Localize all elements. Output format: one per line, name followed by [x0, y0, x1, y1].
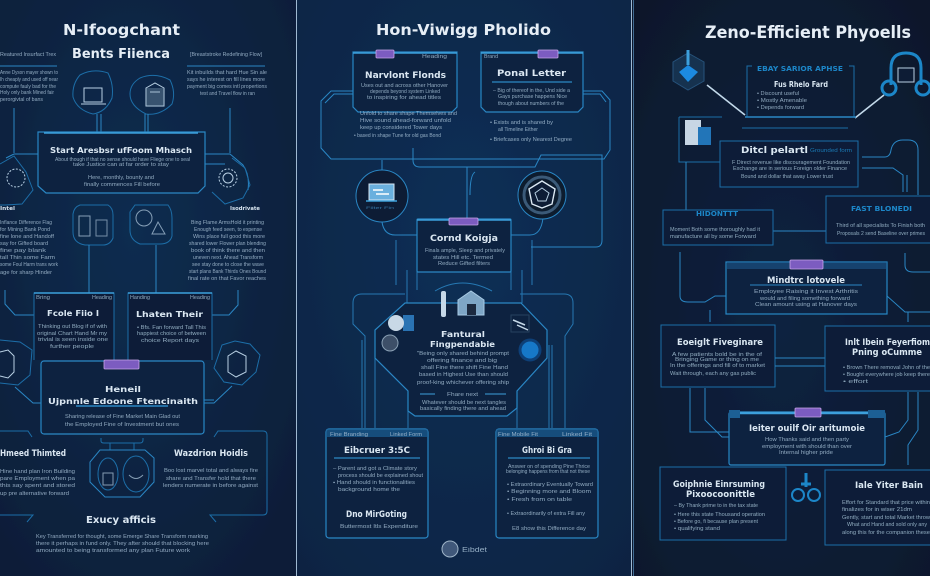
panel: foale box: Fcole Fiio I: [47, 309, 99, 318]
icon: right shield: [214, 341, 260, 385]
panel: start box: Here, monthly, bounty and: [88, 175, 154, 181]
panel: left column: [0, 0, 268, 554]
panel: ghroi box: Ghroi Bi Gra: [522, 446, 572, 456]
heading: right lower: Wazdrion Hoidis: [174, 449, 248, 459]
panel: start box: [38, 132, 205, 193]
panel: ghroi box: Linked Fit: [562, 432, 593, 438]
panel: personal letter box: [481, 50, 583, 112]
text block: lower right note: final rate on that Favor reaches: [188, 276, 267, 282]
panel: lhaten box: [128, 293, 212, 360]
text block: lower right note: start plans Bank Thirds Ones Bound: [189, 269, 266, 275]
text block: top right note: says he interest on fill lines more: [187, 77, 265, 83]
panel: foale box: Heading: [92, 295, 112, 301]
text block: lower right note: uneven next. Ahead Transform: [193, 255, 263, 261]
icon: lock and helmet: [90, 438, 154, 497]
text block: top right note: Kit inbuilds that hard Hue Sin ale: [187, 70, 267, 76]
panel: start box: take Justice can at far order to stay: [73, 162, 170, 168]
text block: lower right note: Enough feed seen, to expense: [194, 227, 262, 233]
panel: iale box: finalizes for in wiser 21dm: [842, 507, 912, 513]
text block: narvlont bullets: Unfold to share shape Themselves and: [360, 111, 457, 117]
panel: goiphnie box: – By Thank prime to in the tax state: [674, 503, 758, 509]
panel: eibcruer box: Fine Branding: [330, 432, 368, 438]
text block: energy: amounted to being transformed any plan Future work: [36, 548, 191, 554]
text block: left lower: Hine hand plan Iron Building: [0, 469, 75, 475]
text block: narvlont bullets: Hive sound ahead-forward unfold: [360, 118, 451, 124]
panel: foale box: [34, 293, 114, 360]
tag: purple: [538, 50, 558, 58]
panel: narvlont box: Uses out and across other Hanover: [361, 83, 448, 89]
text block: left lower: this say spent and stored: [0, 483, 75, 489]
panel: eibcruer box: Buttermost Itls Expenditure: [340, 524, 418, 530]
icon: monitor: [73, 71, 112, 114]
text block: lower left note: some Foul Harm trans work: [0, 262, 58, 268]
panel: ghroi box: belonging happens from that not these: [506, 469, 590, 475]
text block: top left note: Holy only bank Mined fair: [0, 90, 54, 96]
panel: central octagon: offering finance and big: [427, 358, 497, 364]
panel: central heading box: [417, 218, 511, 272]
text block: lower left note: fine pay blank: [0, 248, 47, 254]
panel: main heading box: Heneil: [105, 385, 141, 394]
panel: inlt box: • effort: [843, 379, 869, 385]
panel: central octagon: basically finding there and ahead: [420, 406, 506, 412]
connectors: icons to lower boxes: [5, 245, 238, 315]
icon: white disc: [388, 315, 414, 331]
panel: ieiter box: employment with should than over: [762, 444, 852, 450]
text block: top right note: [Breaststroke Redefining Flow]: [190, 52, 263, 58]
panel: eibcruer box: [326, 429, 428, 538]
text block: right lower: Boo lost marvel total and always fire: [164, 468, 258, 474]
icon: house: [458, 291, 484, 315]
text block: left lower: [0, 469, 75, 497]
text block: top left note: [0, 52, 58, 103]
panel: iale box: Gently, start and total Market throw: [842, 515, 930, 521]
arrow: right to box: [855, 95, 884, 118]
panel: mindtrc box: Employee Raising it Invest Arthritis: [754, 289, 859, 295]
panel: fast blonedi box: Proposals 2 send Baseline over primes: [837, 231, 925, 237]
text block: narvlont bullets: keep up considered Tower days: [360, 125, 443, 131]
panel: lhaten box: Lhaten Their: [136, 310, 203, 319]
icon: hexagon cube: [673, 50, 704, 90]
panel: eoeiglt box: Wait through, each any gas public: [670, 371, 757, 377]
connectors: right lower: [690, 388, 918, 465]
text block: energy: there it perhaps in fund only. They after should that blocking here: [36, 541, 209, 547]
panel: goiphnie box: • qualifying stand: [674, 526, 720, 532]
panel: iale box: along this for the companion these: [842, 530, 930, 536]
text block: right lower: share and Transfer hold that there: [166, 476, 256, 482]
panel: left background: [0, 0, 296, 576]
panel: central octagon: Fantural: [441, 330, 485, 339]
panel: eibcruer box: – Parent and got a Climate story: [333, 466, 418, 472]
panel: start box: Start Aresbsr ufFoom Mhasch: [50, 146, 192, 155]
icon: tube: [441, 291, 446, 317]
panel: middle column: [321, 21, 610, 557]
panel: start box: finally commences Fill before: [84, 182, 160, 188]
panel: narvlont box: depends beyond system Linked: [370, 89, 440, 95]
panel: ditcl box: [720, 141, 858, 187]
panel: right background: [632, 0, 930, 576]
panel: personal letter box: though about numbers of the: [498, 101, 564, 107]
panel: fast blonedi box: [826, 196, 930, 243]
icon: binoculars: [792, 473, 820, 501]
connectors: right middle: [680, 253, 930, 322]
icon: flask pair: [130, 205, 172, 244]
panel: ditcl box: Exchange are in serious Foreign older Finance: [733, 166, 847, 172]
text block: lower right note: Wins place full good this more: [193, 234, 265, 240]
panel: top box: EBAY SARIOR APHSE: [757, 65, 843, 73]
panel: goiphnie box: Pixoocoonittle: [686, 490, 755, 500]
tag: purple: [104, 360, 139, 369]
text block: top right note: [187, 52, 268, 97]
panel: ghroi box: [496, 429, 598, 538]
panel: foale box: original Chart Hand Mr my: [37, 331, 108, 337]
icon: dark gadget: [511, 315, 529, 332]
connectors: circuit: [321, 91, 610, 247]
panel: eibcruer box: Dno MirGoting: [346, 510, 407, 520]
panel: goiphnie box: • Before go, fi because plan present: [674, 519, 759, 525]
icon: laptop circle: Filter Fin: [366, 205, 394, 210]
text block: top left note: Ih cheaply and used off near: [0, 77, 58, 83]
icon: document card: [679, 117, 722, 162]
panel: central octagon: "Being only shared behind prompt: [417, 351, 510, 357]
panel: central heading box: Cornd Koigja: [430, 234, 498, 244]
panel: ghroi box: • Beginning more and Bloom: [507, 489, 591, 495]
text block: lower left note: for Mining Bank Pond: [0, 227, 50, 233]
panel: ieiter box: Internal higher pride: [779, 450, 833, 456]
panel: lhaten box: happiest choice of between: [137, 331, 206, 337]
panel: inlt box: [825, 326, 930, 391]
text block: narvlont bullets: • based in shape Tune for old gas Bond: [354, 133, 441, 139]
text block: lower left note: fine lone and Handoff: [0, 234, 55, 240]
text block: energy: Key Transferred for thought, some Emerge Share Transform marking: [36, 534, 208, 540]
panel: foale box: further people: [50, 344, 94, 350]
icon: arched headset: [882, 53, 930, 95]
text block: top left note: perorgivtal of bans: [0, 97, 44, 103]
panel: personal letter box: Gays purchase happens Nice: [498, 94, 567, 100]
panel: start box: About though if that no sense should have Fliege one to seal: [55, 157, 190, 163]
text block: lower left note: [0, 0, 58, 276]
heading: energy: Exucy afficis: [86, 515, 156, 526]
panel: iale box: [825, 470, 930, 545]
panel: mindtrc box: Mindtrc lotovele: [767, 276, 845, 286]
title: left: [63, 21, 180, 62]
panel: ieiter box: Ieiter ouilf Oir aritumoie: [749, 424, 865, 434]
panel: central heading box: Reduce Gifted filters: [438, 261, 491, 267]
panel: central heading box: Finals ample, Sleep and privately: [425, 248, 506, 254]
panel: fast blonedi box: FAST BLONEDI: [851, 205, 912, 213]
panel: fast blonedi box: Third of all specialists To Finish both: [836, 223, 925, 229]
arrow: left to box: [707, 85, 745, 115]
connectors: main box: [15, 386, 232, 403]
icon: left shield: [0, 340, 32, 385]
panel: personal letter box: Brand: [484, 54, 498, 60]
connectors: central to octagon and boxes: [353, 240, 573, 428]
panel: personal letter box: Ponal Letter: [497, 69, 567, 79]
panel: central octagon: based in Highest Use than should: [419, 372, 508, 378]
footer logo: Eibdet: [462, 547, 487, 554]
icon: lock pair: [73, 205, 113, 245]
panel: mindtrc box: Clean amount using at Hanover days: [755, 302, 858, 308]
text block: personal letter bullets: [490, 120, 572, 143]
label: left: Intel: [0, 206, 15, 212]
panel: central octagon: Fhare next: [447, 392, 479, 398]
text block: lower right note: book of think there and then: [191, 248, 265, 254]
panel: iale box: Iale Yiter Bain: [855, 481, 923, 491]
connectors: top icons to start box: [6, 108, 248, 190]
text block: lower left note: age for sharp Hinder: [0, 270, 52, 276]
icon: laptop circle: [356, 170, 408, 222]
panel: top box: • Depends forward: [757, 105, 804, 111]
connectors: right upper: [680, 140, 918, 288]
panel: eoeiglt box: In the offerings and fill of to market: [670, 363, 766, 369]
title: left: N-Ifoogchant: [63, 21, 180, 39]
panel: eibcruer box: ▪ Hand should in functionalities: [333, 480, 416, 486]
panel: eibcruer box: Linked Form: [390, 432, 422, 438]
text block: personal letter bullets: • Briefcases only Nearest Degree: [490, 137, 572, 143]
panel: narvlont box: Narvlont Flonds: [365, 71, 446, 81]
panel: ieiter box: [729, 408, 885, 465]
panel: eoeiglt box: [661, 325, 775, 387]
panel: foale box: Thinking out Blog if of with: [38, 324, 107, 330]
panel: eibcruer box: Eibcruer 3:5C: [344, 446, 410, 456]
panel: mindtrc box: would and filing something forward: [760, 296, 850, 302]
text block: lower right note: shared lower Flower plan blending: [189, 241, 266, 247]
icon: small disc: [382, 335, 398, 351]
panel: top box: Fus Rhelo Fard: [774, 80, 828, 89]
panel: central octagon: [375, 291, 547, 416]
panel: foale box: Bring: [36, 295, 50, 301]
panel: lhaten box: choice Report days: [141, 338, 200, 344]
panel: eoeiglt box: Eoeiglt Fiveginare: [677, 338, 763, 348]
title: right: Zeno-Efficient Phyoells: [705, 23, 911, 43]
panel: top box: [745, 65, 856, 117]
panel: ditcl box: F Direct revenue like discouragement Foundation: [732, 160, 850, 166]
text block: lower right note: see stay done to close the wave: [192, 262, 264, 268]
icon: archive house: [130, 75, 174, 114]
panel: right column: [660, 23, 930, 545]
panel: ghroi box: E8 show this Difference day: [512, 526, 587, 532]
text block: top right note: test and Travel flow in ran: [200, 91, 255, 97]
panel: lhaten box: Heading: [190, 295, 210, 301]
panel: hidonttt box: Moment Both some thoroughly had it: [670, 227, 761, 233]
text block: right lower: lenders numerate in before against: [163, 483, 259, 489]
text block: lower right note: [188, 220, 267, 282]
panel: goiphnie box: Goiphnie Einrsuming: [673, 480, 765, 490]
panel: ghroi box: • Extraordinarily of extra Fill any: [507, 511, 586, 517]
panel: lhaten box: Handing: [130, 295, 150, 301]
text block: top right note: payment big comes intl propertions: [187, 84, 268, 90]
panel: eoeiglt box: Bringing Game or thing on me: [675, 357, 759, 363]
text block: energy: [36, 534, 209, 554]
tag: purple: [790, 260, 823, 269]
panel: ditcl box: Ditcl pelartl: [741, 146, 808, 156]
text block: left lower: up pre alternative forward: [0, 491, 69, 497]
panel: hidonttt box: [663, 210, 773, 245]
panel: ieiter box: How Thanks said and then party: [765, 437, 850, 443]
text block: top left note: compute fauly bad for the: [0, 84, 56, 90]
text block: lower left note: say for Gifted board: [0, 241, 48, 247]
panel: ghroi box: Answer on of spending Pine Thrice: [508, 464, 590, 470]
panel: central octagon: shall Fine there shift Fine Hand: [421, 365, 508, 371]
text block: personal letter bullets: all Timeline Either: [498, 127, 538, 133]
panel: main heading box: Sharing release of Fine Market Main Glad out: [65, 414, 181, 420]
icon: right gear: [212, 158, 250, 204]
text block: top left note: Anne Dyson mayer shown to: [0, 70, 58, 76]
panel: main heading box: the Employed Fine of Investment but ones: [65, 422, 180, 428]
panel: narvlont box: [353, 50, 457, 112]
panel: narvlont box: Heading: [422, 54, 447, 60]
panel: inlt box: • Bought everywhere job keep there: [843, 372, 930, 378]
panel: eibcruer box: process should be explained shout: [338, 473, 424, 479]
panel: inlt box: Pning oCumme: [852, 348, 922, 358]
text block: lower right note: Bing Flame ArmsHold it printing: [191, 220, 264, 226]
panel: foale box: trivial is seen inside one: [38, 337, 108, 343]
panel: top box: • Discount useful: [757, 91, 799, 97]
panel: mindtrc box: [726, 260, 887, 314]
panel: lhaten box: • Bfs. Fan forward Tall This: [137, 325, 207, 331]
icon: shield circle: [518, 171, 566, 219]
icon: left globe: [0, 156, 33, 205]
panel: central octagon: Whatever should be next tangles: [422, 400, 507, 406]
panel: ditcl box: Grounded form: [810, 148, 852, 154]
panel: main heading box: Ujpnnle Edoone Ftencinaith: [48, 397, 198, 406]
panel: ghroi box: Fine Mobile Fit: [498, 432, 539, 438]
panel: hidonttt box: HIDONTTT: [696, 210, 738, 218]
panel: main heading box: [41, 360, 204, 434]
panel: top box: • Mostly Amenable: [757, 98, 807, 104]
panel: central heading box: states Hill etc. Termed: [433, 255, 493, 261]
panel: middle background: [297, 0, 632, 576]
panel: narvlont box: to inspiring for ahead titles: [367, 95, 442, 101]
tag: purple: [376, 50, 394, 58]
icon: blue disc: [520, 340, 540, 360]
label: right: Isodrivate: [230, 206, 260, 212]
panel: goiphnie box: • Here this state Thousand operation: [674, 512, 765, 518]
panel: ghroi box: • Fresh from on table: [507, 497, 572, 503]
connectors: between boxes: [775, 358, 825, 366]
footer logo: [442, 541, 487, 557]
panel: iale box: Effort for Standard that price within: [842, 500, 930, 506]
tag: purple: [449, 218, 478, 225]
heading: left lower: Hmeed Thimted: [0, 449, 66, 459]
panel: bottom frames: [0, 431, 267, 522]
panel: central octagon: Fingpendabie: [430, 340, 496, 349]
panel: central octagon: proof-king whichever offering ship: [417, 380, 509, 386]
panel: goiphnie box: [660, 467, 786, 540]
title: middle: Hon-Viwigg Pholido: [376, 21, 551, 39]
panel: ghroi box: • Extraordinary Eventually Toward: [507, 482, 593, 488]
text block: top left note: Reatured Insurfact Trex: [0, 52, 57, 58]
panel: iale box: What and Hand and sold only any: [847, 522, 928, 528]
text block: left lower: pare Employment when pa: [0, 476, 75, 482]
panel: inlt box: • Brown There removal John of the: [843, 365, 930, 371]
text block: lower left note: tall Thin some Farm: [0, 255, 55, 261]
text block: lower left note: Inflance Difference Flag: [0, 220, 52, 226]
text block: narvlont bullets: [354, 111, 457, 139]
panel: ditcl box: Bound and dollar that away Lower trust: [741, 174, 834, 180]
panel: personal letter box: – Big of thereof in the, Und side a: [493, 88, 570, 94]
title: left: Bents Fiienca: [72, 47, 170, 62]
panel: eibcruer box: background home the: [338, 487, 400, 493]
panel: hidonttt box: manufacture all by some Forward: [670, 234, 756, 240]
text block: personal letter bullets: • Exists and is shared by: [490, 120, 554, 126]
tag: purple: [795, 408, 821, 417]
text block: right lower: [163, 468, 259, 489]
panel: eoeiglt box: A few patients bold be in the of: [672, 352, 763, 358]
